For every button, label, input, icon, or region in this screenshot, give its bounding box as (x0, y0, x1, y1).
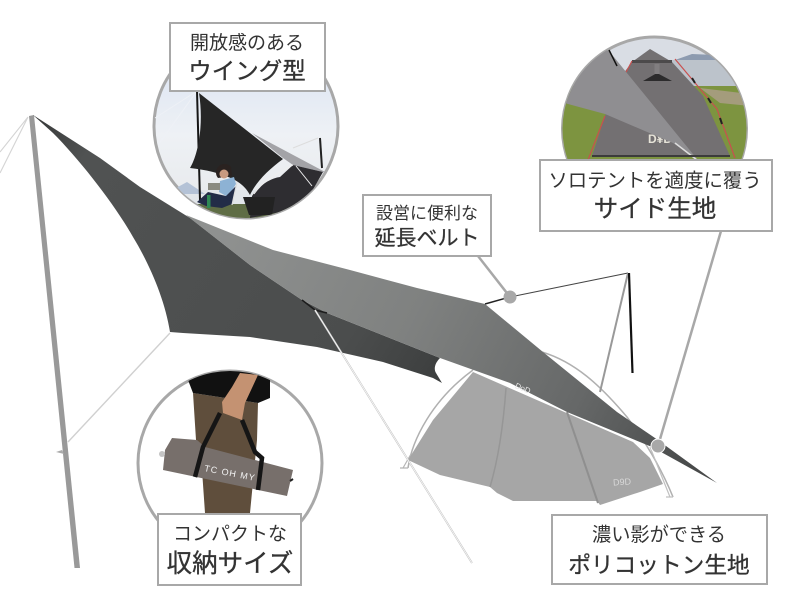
label: polycotton fabric: 濃い影ができる (592, 524, 726, 546)
label: wing type: ウイング型 (188, 58, 306, 84)
pole and guy lines (0, 115, 170, 568)
tent logo: D9D (613, 476, 632, 488)
tarp light panel (186, 215, 717, 483)
panel: side fabric photo circle: D¥D (648, 132, 672, 146)
tarp logos: DoD (514, 381, 532, 396)
tent silhouette (400, 352, 673, 505)
label: side fabric (540, 160, 772, 231)
panel: wing photo circle (152, 73, 340, 220)
panel: compact photo circle (136, 370, 324, 522)
leader: belt (478, 256, 516, 304)
panel: side fabric photo circle (561, 36, 748, 159)
tarp (33, 115, 717, 563)
label: extension belt: 延長ベルト (374, 227, 480, 250)
panel: compact photo circle: TC OH MY (204, 463, 256, 483)
label: side fabric: ソロテントを適度に覆う (548, 170, 762, 192)
label: wing type: 開放感のある (190, 32, 304, 54)
tarp dark panel (33, 115, 442, 383)
label: extension belt: 設営に便利な (376, 204, 478, 223)
label: extension belt (363, 195, 491, 256)
label: polycotton fabric (552, 515, 767, 584)
label: side fabric: サイド生地 (594, 195, 716, 223)
label: compact size: コンパクトな (173, 523, 287, 545)
tie-out point and cord (302, 300, 472, 563)
label: wing type (170, 23, 325, 91)
leader: side fabric (651, 231, 721, 453)
label: compact size (158, 514, 301, 585)
label: compact size: 収納サイズ (167, 550, 293, 578)
belt, side pole and strap (485, 273, 632, 392)
label: polycotton fabric: ポリコットン生地 (568, 552, 750, 578)
